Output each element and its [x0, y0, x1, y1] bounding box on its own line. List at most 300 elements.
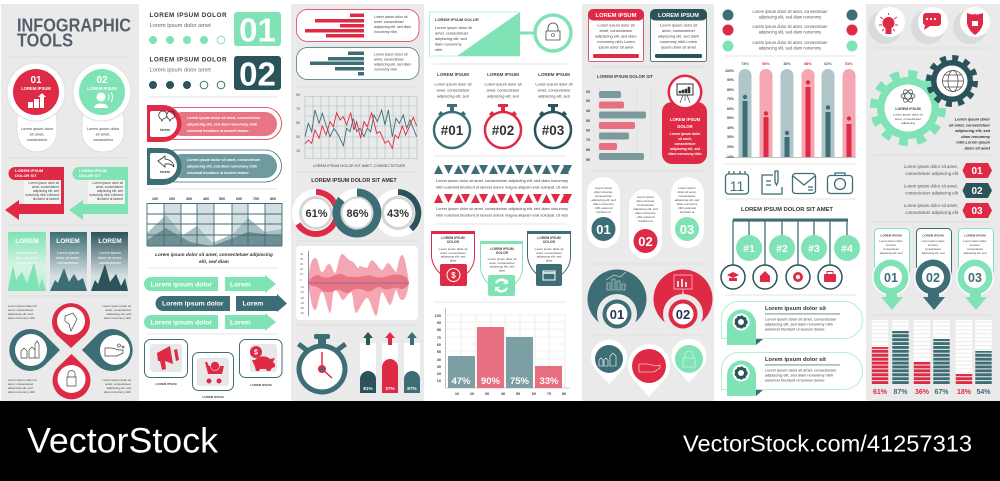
shield cards: Lorem ipsum dolor sit: [439, 247, 468, 251]
line chart: 70: [296, 107, 300, 111]
rating 02: LOREM IPSUM DOLOR: [150, 56, 227, 64]
gears: [875, 59, 974, 141]
number pills: diam nonummy: [635, 211, 656, 215]
presentation card: [662, 74, 707, 164]
title: INFOGRAPHIC: [17, 16, 131, 36]
shield cards: $: [451, 271, 456, 280]
shield cards: adipiscing elit, sed: [537, 255, 562, 259]
line chart: 10: [296, 149, 300, 153]
teal bar card: Lorem ipsum dolor sit: [374, 52, 407, 56]
number pills: 03: [680, 222, 694, 237]
number pills: consectetuer: [637, 203, 654, 207]
arrow pins: consectetuer: [967, 247, 983, 251]
rating 01: 01: [239, 12, 276, 48]
tree heading: LOREM IPSUM DOLOR SIT AMET: [741, 207, 833, 213]
panel 4: [430, 12, 574, 396]
text card 1: Lorem ipsum dolor sit: [765, 306, 826, 312]
red bar card: [296, 10, 419, 42]
gears: LOREM IPSUM: [895, 107, 921, 111]
arrow bars: 37%: [385, 386, 396, 391]
bar chart: 20: [437, 372, 441, 376]
green arrow note: DOLOR SIT: [79, 173, 101, 178]
column chart: [725, 62, 856, 159]
bar chart: 50: [437, 350, 441, 354]
reply band: [147, 148, 282, 185]
round icons: [868, 7, 990, 44]
red triangle band: nibh euismod tincidunt ut laoreet dolore magna aliquam erat volutpat. Ut wisi: [436, 212, 568, 218]
teal text card: LOREM IPSUM: [658, 13, 699, 19]
teal triangle band: nibh euismod tincidunt ut laoreet dolore magna aliquam erat volutpat. Ut wisi: [436, 184, 568, 190]
gears: adipiscing: [901, 121, 915, 125]
pin cluster: Lorem ipsum dolor sit: [8, 378, 37, 382]
circle card 02: consectetur: [93, 137, 114, 142]
red text card: nonummy nibh.Lorem: [597, 39, 635, 44]
column chart: 62%: [824, 62, 832, 66]
italic side note: diam nonummy: [961, 134, 991, 139]
striped bars: 67%: [934, 389, 949, 396]
line chart: [296, 93, 417, 168]
legend rows: adipiscing elit, sed diam nonummy: [759, 29, 822, 34]
red arrow note: adipiscing elit, sed: [33, 189, 59, 193]
area chart: 500: [219, 197, 225, 201]
shield cards: [431, 231, 571, 296]
horizontal bar chart: 30: [586, 99, 590, 103]
stopwatch columns: Lorem ipsum dolor sit: [434, 82, 473, 86]
stopwatch large: [296, 334, 348, 394]
arrow pins: sit amet,: [970, 243, 981, 247]
red text card: amet, consectetuer: [599, 28, 633, 33]
circle card 01: sit amet,: [30, 132, 44, 136]
wave chart: [296, 246, 418, 320]
shield cards: adipiscing elit, sed: [441, 255, 466, 259]
stopwatch columns: Lorem ipsum dolor sit: [484, 82, 523, 86]
arrow pins: consectetuer: [883, 247, 899, 251]
italic side note: adipiscing elit, sed: [955, 128, 991, 133]
quote band: adipiscing elit, sed diam nonummy nibh: [187, 122, 258, 126]
legend rows: adipiscing elit, sed diam nonummy: [759, 14, 822, 19]
teal text card: Lorem ipsum dolor sit: [660, 22, 698, 28]
mountain cards: dolor sit amet,: [56, 256, 80, 260]
stopwatch columns: #01: [441, 123, 464, 138]
red text card: LOREM IPSUM: [596, 13, 637, 19]
mountain cards: consectetuer: [16, 261, 39, 265]
column chart: 20%: [727, 145, 735, 149]
arrow rows: Lorem: [230, 320, 251, 326]
striped bars: 61%: [873, 389, 888, 396]
lock callout: diam nonummy: [435, 42, 462, 46]
number pills: tincidunt ut: [680, 210, 694, 214]
stopwatch columns: #03: [542, 123, 565, 138]
rating 02: [149, 56, 281, 92]
red bar card: amet, consectetuer: [374, 20, 405, 24]
italic side note: sit amet, consectetuer: [949, 122, 990, 127]
hexagon list: Lorem ipsum dolor sit amet,: [904, 164, 958, 169]
donut charts: [292, 178, 422, 238]
rating 01: [149, 12, 281, 48]
icon boxes: LOREM IPSUM: [155, 382, 177, 386]
pin cluster: amet, consectetuer: [8, 382, 34, 386]
teal bar card: adipiscing elit, sed diam: [374, 62, 411, 66]
red arrow note: DOLOR SIT: [15, 173, 37, 178]
wave chart: -30: [300, 296, 304, 300]
stopwatch columns: amet, consectetuer: [537, 88, 571, 92]
green arrow note: adipiscing elit, sed: [97, 189, 123, 193]
lock callout: [430, 12, 571, 56]
arrow pins: LOREM IPSUM: [964, 234, 986, 238]
number pills: Lorem ipsum: [637, 195, 655, 199]
text card 1: euismod tincidunt ut laoreet dolore: [765, 326, 824, 332]
column chart: 90%: [727, 78, 735, 82]
horizontal bar chart: 80: [586, 148, 590, 152]
green arrow note: amet, consectetuer: [96, 185, 124, 189]
wave chart: 30: [300, 262, 304, 266]
horizontal bar chart: 60: [586, 128, 590, 132]
footer bar: VectorStock.com/41257313: [683, 430, 972, 456]
big circle 02: 02: [676, 307, 690, 322]
column chart: 10%: [727, 155, 735, 159]
panel 5: [586, 9, 712, 397]
line chart: 90: [296, 93, 300, 97]
arrow pins: sit amet,: [886, 243, 897, 247]
red text card: [588, 9, 644, 62]
text card 1: Lorem ipsum dolor sit amet, consectetuer: [765, 316, 837, 322]
stopwatch columns: LOREM IPSUM: [437, 72, 469, 77]
bar chart: 50: [516, 392, 520, 396]
column chart: 88%: [804, 62, 812, 66]
teal text card: [650, 9, 707, 62]
red bar card: Lorem ipsum dolor sit: [374, 15, 407, 19]
stopwatch columns: adipiscing elit, sed: [437, 94, 469, 98]
bar chart: 40: [501, 392, 505, 396]
column chart: 51%: [845, 62, 853, 66]
icon boxes: LOREM IPSUM: [202, 395, 224, 399]
hexagon list: [904, 163, 992, 218]
bar chart: 80: [437, 328, 441, 332]
red arrow note: tincidunt ut laoreet: [33, 197, 59, 201]
bar chart: 70: [547, 392, 551, 396]
number pills: dolor sit amet,: [678, 190, 697, 194]
quote band: [147, 105, 282, 142]
green arrow note: [69, 167, 128, 220]
bar chart: [435, 308, 570, 396]
wave chart: 20: [300, 267, 304, 271]
icon boxes: $: [254, 350, 258, 356]
shield cards: adipiscing elit, sed: [490, 265, 515, 269]
pin cluster: Lorem ipsum dolor sit: [102, 378, 131, 382]
column chart: 70%: [727, 97, 735, 101]
pin cluster: Lorem ipsum dolor sit: [8, 304, 37, 308]
number pills: dolor sit amet,: [594, 190, 613, 194]
lock callout: amet, consectetuer: [435, 30, 469, 36]
italic side note: nibh.Lorem ipsum: [956, 140, 991, 145]
lock callout: Lorem ipsum dolor sit: [435, 25, 473, 30]
bar chart: 90: [437, 321, 441, 325]
stopwatch columns: amet, consectetuer: [486, 88, 520, 92]
panel 2: [144, 12, 287, 399]
dividers: [8, 48, 990, 335]
bar chart: 30: [437, 365, 441, 369]
arrow pins: consectetuer: [925, 247, 941, 251]
arrow rows: [144, 275, 287, 331]
mountain cards: LOREM: [56, 238, 80, 245]
stopwatch columns: adipiscing elit, sed: [538, 94, 570, 98]
bar chart: 10: [455, 392, 459, 396]
arrow pins: Lorem ipsum dolor: [921, 239, 945, 243]
number pills: diam nonummy: [677, 202, 698, 206]
arrow rows: Lorem: [242, 300, 263, 308]
tree diagram: #4: [841, 243, 853, 255]
teal triangle band: Lorem ipsum dolor sit amet, consectetuer adipiscing elit, sed diam nonummy: [436, 178, 568, 183]
horizontal bar chart: 50: [586, 119, 590, 123]
number pills: Lorem ipsum: [678, 186, 696, 190]
number pills: tincidunt ut: [596, 210, 611, 214]
panel 3: [292, 10, 422, 394]
presentation card: consectetuer: [674, 142, 696, 146]
striped bars: 87%: [893, 389, 908, 396]
green arrow note: nonummy nibh euismod: [89, 193, 123, 197]
circle card 01: LOREM IPSUM: [21, 86, 51, 91]
shield cards: amet, consectetuer: [536, 251, 562, 255]
big circle 01: [588, 270, 646, 335]
lock callout: nibh: [435, 47, 442, 52]
lock callout: adipiscing elit, sed: [435, 36, 467, 41]
green arrow note: tincidunt ut laoreet: [97, 197, 123, 201]
hexagon list: 01: [971, 166, 983, 177]
rating 02: Lorem ipsum dolor amet: [150, 68, 211, 74]
text card 2: [722, 352, 863, 396]
shield cards: LOREM IPSUM: [537, 236, 561, 240]
arrow bars: 81%: [363, 386, 374, 391]
red text card: Lorem ipsum dolor sit: [597, 22, 636, 28]
pin cluster: amet, consectetuer: [8, 308, 34, 312]
number pills: Lorem ipsum: [595, 186, 613, 190]
title: [17, 16, 131, 50]
mountain cards: Lorem ipsum: [99, 251, 121, 255]
wave chart: -60: [300, 311, 304, 315]
pin cluster: adipiscing elit, sed: [8, 386, 33, 390]
arrow pins: sit amet,: [928, 243, 939, 247]
bar chart: 33%: [539, 376, 559, 387]
horizontal bar chart: 40: [586, 109, 590, 113]
number pills: [587, 177, 704, 259]
donut charts: LOREM IPSUM DOLOR SIT AMET: [311, 178, 397, 184]
text card 1: [722, 302, 863, 345]
number pills: adipiscing elit, sed: [675, 198, 700, 202]
wave chart: -50: [300, 306, 304, 310]
mountain cards: consectetuer: [57, 261, 80, 265]
column chart: 38%: [783, 62, 791, 66]
icon boxes: LOREM IPSUM: [250, 383, 272, 387]
circle card 01: 01: [30, 75, 42, 86]
bar chart: 75%: [510, 376, 530, 387]
wave chart: -10: [300, 285, 304, 289]
red bar card: adipiscing elit, sed diam: [374, 25, 411, 29]
mountain cards: [8, 232, 128, 291]
shield cards: DOLOR: [447, 240, 460, 244]
tree diagram: #2: [776, 243, 788, 255]
lock callout: LOREM IPSUM DOLOR: [435, 17, 479, 22]
pin cluster: amet, consectetuer: [105, 382, 131, 386]
column chart: 40%: [727, 126, 735, 130]
line chart: 50: [296, 121, 300, 125]
horizontal bar chart: 90: [586, 158, 590, 162]
column chart: 80%: [727, 88, 735, 92]
teal bar card: nonummy nibh: [374, 68, 397, 72]
hexagon list: Lorem ipsum dolor sit amet,: [904, 184, 958, 188]
pin cluster: [8, 303, 133, 399]
horizontal bar chart: [586, 74, 653, 163]
reply band: lorem: [160, 170, 170, 174]
pin cluster: adipiscing elit, sed: [8, 312, 33, 316]
hexagon list: consectetuer adipiscing elit: [905, 210, 959, 215]
text card 2: adipiscing elit, sed diam nonummy nibh: [765, 372, 833, 378]
red arrow note: nonummy nibh euismod: [25, 193, 59, 197]
donut charts: 86%: [346, 208, 369, 220]
panel 6: [721, 9, 863, 396]
horizontal bar chart: 20: [586, 90, 590, 94]
arrow pins: adipiscing elit, sed: [964, 251, 987, 255]
number pills: nibh euismod: [595, 206, 613, 210]
red text card: ipsum dolor sit amet: [599, 44, 634, 50]
bar chart: 30: [485, 392, 489, 396]
circle card 02: [73, 63, 131, 152]
column chart: 73%: [741, 62, 749, 66]
column chart: 54%: [762, 62, 770, 66]
tree diagram: [721, 220, 860, 289]
arrow pins: LOREM IPSUM: [922, 234, 944, 238]
number pills: tincidunt ut: [638, 219, 653, 223]
stopwatch columns: [434, 72, 574, 148]
presentation card: LOREM IPSUM: [670, 117, 701, 122]
pin cluster: amet, consectetuer: [105, 308, 131, 312]
bar chart: 20: [470, 392, 474, 396]
teal text card: adipiscing elit, sed diam: [658, 34, 699, 38]
teal bar card: amet, consectetuer: [374, 58, 405, 62]
tree diagram: #3: [808, 243, 820, 255]
bar chart: 90%: [481, 376, 501, 387]
icon row: [726, 171, 852, 194]
red bar card: nonummy nibh: [374, 30, 397, 34]
bar chart: 60: [532, 392, 536, 396]
pin cluster: diam nonummy nibh: [8, 390, 35, 394]
donut charts: 61%: [305, 208, 328, 220]
arrow pins: 03: [968, 271, 982, 285]
shield cards: DOLOR: [543, 240, 556, 244]
presentation card: adipiscing elit, sed: [670, 147, 700, 151]
hexagon list: consectetuer adipiscing elit: [905, 190, 959, 196]
bar chart: 10: [437, 379, 441, 383]
bar chart: 60: [437, 343, 441, 347]
number pills: 01: [596, 222, 611, 237]
pin cluster: diam nonummy nibh: [8, 316, 35, 320]
title: TOOLS: [17, 30, 73, 50]
text card 2: euismod tincidunt ut laoreet dolore: [765, 378, 824, 382]
quote band: Lorem ipsum dolor sit amet, consectetuer: [187, 116, 261, 120]
horizontal bar chart: 70: [586, 138, 590, 142]
pin cluster: adipiscing elit, sed: [106, 312, 131, 316]
teal text card: amet, consectetuer: [662, 28, 696, 33]
circle card 02: Lorem ipsum dolor: [87, 126, 120, 131]
pin cluster: diam nonummy nibh: [104, 390, 131, 394]
column chart: 50%: [727, 116, 735, 120]
presentation card: sit amet,: [678, 137, 692, 141]
red arrow note: Lorem ipsum dolor sit: [29, 181, 59, 185]
legend rows: Lorem ipsum dolor sit amet, consectetuer: [752, 9, 828, 14]
line chart: 30: [296, 135, 300, 139]
big circle 02: [654, 270, 712, 335]
wave chart: 0: [300, 278, 302, 282]
map pins: [591, 339, 707, 397]
mountain cards: Lorem ipsum: [16, 251, 38, 255]
footer bar: VectorStock: [27, 422, 219, 460]
stopwatch columns: #02: [492, 123, 514, 138]
wave chart: -40: [300, 301, 304, 305]
arrow pins: 02: [926, 271, 940, 285]
hexagon list: 02: [971, 186, 983, 197]
shield cards: diam: [450, 258, 457, 262]
area chart: 600: [236, 197, 242, 201]
bar chart: 80: [562, 392, 566, 396]
wave chart: 40: [300, 252, 304, 256]
mountain cards: LOREM: [15, 238, 39, 245]
red arrow note: [5, 167, 64, 220]
number pills: adipiscing elit, sed: [591, 198, 616, 202]
mountain cards: consectetuer: [99, 261, 122, 265]
mountain cards: LOREM: [98, 238, 122, 245]
arrow rows: Lorem ipsum dolor: [162, 300, 224, 308]
area chart: 100: [152, 197, 158, 201]
bar chart: 100: [435, 314, 441, 318]
arrow rows: Lorem ipsum dolor: [150, 320, 212, 326]
red triangle band: Lorem ipsum dolor sit amet, consectetuer adipiscing elit, sed diam nonummy: [436, 206, 568, 211]
shield cards: diam: [499, 268, 506, 272]
striped bars: 18%: [957, 389, 972, 396]
tree diagram: #1: [743, 243, 755, 255]
pin cluster: Lorem ipsum dolor sit: [102, 304, 131, 308]
reply band: Lorem ipsum dolor sit amet, consectetuer: [187, 158, 261, 162]
circle card 02: sit amet,: [96, 132, 110, 136]
arrow pins: [872, 228, 994, 310]
stopwatch columns: LOREM IPSUM: [487, 72, 519, 77]
mountain cards: dolor sit amet,: [98, 256, 122, 260]
arrow pins: Lorem ipsum dolor: [963, 239, 987, 243]
text card 1: adipiscing elit, sed diam nonummy nibh: [765, 322, 833, 326]
panel 7: [868, 7, 994, 396]
italic side note: Lorem ipsum dolor: [955, 116, 990, 122]
legend rows: adipiscing elit, sed diam nonummy: [759, 45, 822, 50]
green arrow note: Lorem ipsum dolor sit: [93, 181, 123, 185]
shield cards: amet, consectetuer: [489, 261, 515, 265]
pin cluster: diam nonummy nibh: [104, 316, 131, 320]
striped bars: 36%: [915, 389, 930, 396]
number pills: dolor sit amet,: [636, 199, 655, 203]
arrow pins: Lorem ipsum dolor: [879, 239, 903, 243]
wave chart: 10: [300, 272, 304, 276]
red text card: adipiscing elit, sed diam: [595, 34, 637, 38]
hexagon list: Lorem ipsum dolor sit amet,: [904, 203, 958, 208]
arrow pins: adipiscing elit, sed: [922, 251, 945, 255]
shield cards: Lorem ipsum dolor sit: [488, 257, 516, 261]
column chart: 30%: [727, 135, 735, 139]
stopwatch columns: LOREM IPSUM: [538, 72, 570, 77]
big circle 01: 01: [610, 307, 624, 322]
hexagon list: consectetuer adipiscing elit: [905, 171, 959, 176]
area chart: 400: [203, 197, 209, 201]
circle card 01: consectetur: [27, 137, 48, 142]
stopwatch columns: Lorem ipsum dolor sit: [535, 82, 574, 86]
wave chart: -20: [300, 290, 304, 294]
icon row: 11: [730, 178, 744, 194]
